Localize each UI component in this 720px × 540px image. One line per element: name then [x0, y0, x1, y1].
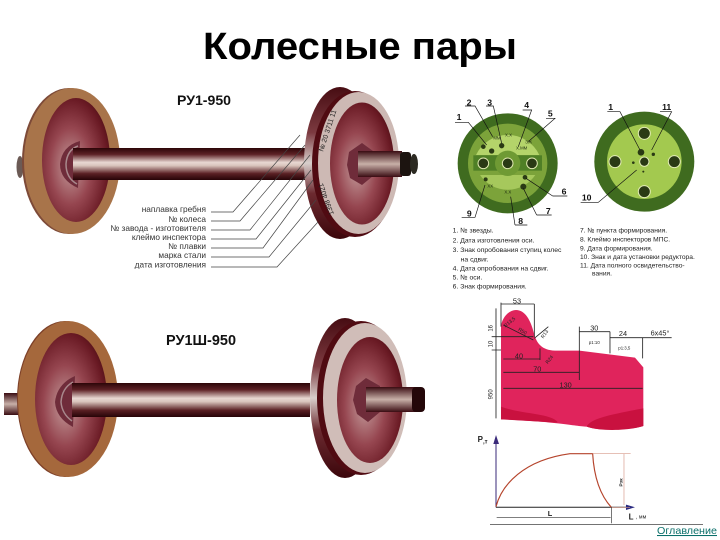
- dimension values: 130: [560, 380, 572, 389]
- curve: [496, 454, 611, 507]
- callout labels: № плавки: [168, 241, 206, 251]
- stamps on the end face: Х.Х: [505, 133, 512, 138]
- diagram numbers: 9: [467, 209, 472, 219]
- Рж dimension: [593, 454, 631, 507]
- callout labels: дата изготовления: [135, 260, 206, 270]
- diagram numbers: 1: [457, 112, 462, 122]
- dimension values: R50: [517, 327, 528, 337]
- load graph: L: [629, 512, 634, 521]
- footer rule: [490, 524, 703, 526]
- L dimension: [497, 507, 612, 523]
- stamps on the end face: ММ: [493, 135, 501, 140]
- callout labels: наплавка гребня: [142, 204, 206, 214]
- callout labels: [110, 204, 206, 270]
- legend: left column: 4. Дата опробования на сдвиг.: [453, 264, 549, 272]
- diagram numbers: 5: [548, 109, 553, 119]
- dimension values: 30: [590, 324, 598, 333]
- stamps on the end face: Х.Х: [504, 189, 511, 194]
- callout labels: марка стали: [158, 250, 206, 260]
- dimension lines: [492, 303, 672, 418]
- dimension values: 10: [489, 340, 495, 347]
- model label: РУ1Ш-950: РУ1Ш-950: [166, 333, 236, 349]
- legend: right column: 7. № пункта формирования.: [580, 228, 667, 235]
- callout labels: клеймо инспектора: [132, 232, 206, 242]
- diagram numbers: 3: [487, 97, 492, 107]
- axle: [72, 383, 310, 417]
- stamps on the end face: [487, 133, 532, 194]
- stamps on the end face: ХХ: [487, 183, 493, 188]
- dimension values: 16: [489, 324, 495, 332]
- dimension values: p1:3,5: [618, 345, 631, 350]
- wheelset: РУ1Ш-950: [4, 318, 425, 478]
- load graph: , мм: [636, 515, 647, 521]
- left wheel: [16, 88, 120, 234]
- load graph: Рзк: [618, 478, 624, 487]
- diagram numbers: 2: [467, 97, 472, 107]
- stamps on the end face: ЭЖ: [525, 139, 532, 144]
- wheel profile: [489, 297, 672, 430]
- dimension values: [489, 297, 669, 399]
- legend: right column: вания.: [592, 271, 612, 278]
- dimension values: 6x45°: [651, 328, 669, 337]
- dimension values: 24: [619, 329, 627, 338]
- dimension values: 950: [489, 389, 495, 399]
- diagram numbers: 11: [662, 102, 671, 112]
- right wheel: [304, 87, 418, 239]
- diagram: left axle end: [458, 113, 558, 213]
- diagram numbers: 8: [518, 216, 523, 226]
- dimension values: 40: [515, 352, 523, 361]
- load graph: ,т: [483, 439, 488, 445]
- diagram numbers: 6: [562, 187, 567, 197]
- callout leader lines: [211, 135, 318, 267]
- model label: РУ1-950: РУ1-950: [177, 92, 231, 108]
- legend: right column: 9. Дата формирования.: [580, 245, 653, 252]
- load graph: P: [478, 435, 484, 444]
- dimension values: 70: [533, 365, 541, 374]
- stamps on the end face: Х.ММ: [516, 145, 528, 150]
- diagram numbers: 7: [546, 206, 551, 216]
- wheelset: РУ1-950: 1398 4021: [318, 182, 336, 216]
- diagram numbers: 4: [524, 100, 529, 110]
- diagram leader lines: [455, 106, 672, 225]
- load graph: L: [548, 509, 553, 518]
- callout labels: № колеса: [168, 214, 206, 224]
- legend: left column: 3. Знак опробования ступиц колес: [453, 246, 562, 254]
- legend: right column: [580, 228, 695, 278]
- legend: right column: 10. Знак и дата установки редуктора.: [580, 254, 695, 261]
- dimension values: p1:10: [589, 340, 600, 345]
- diagram numbers: [457, 97, 671, 226]
- legend: left column: [453, 228, 562, 291]
- legend: left column: 1. № звезды.: [453, 228, 494, 235]
- bolt holes: [478, 158, 537, 169]
- legend: left column: 5. № оси.: [453, 274, 483, 281]
- axle: [73, 148, 310, 180]
- legend: right column: 8. Клеймо инспекторов МПС.: [580, 236, 670, 244]
- dimension values: 53: [513, 297, 521, 306]
- callout labels: № завода - изготовителя: [110, 223, 206, 233]
- legend: right column: 11. Дата полного освидетельство-: [580, 262, 685, 269]
- right wheel: [310, 318, 425, 478]
- dimension values: R13: [540, 329, 550, 340]
- left wheel: [4, 321, 118, 477]
- diagram numbers: 10: [582, 193, 592, 203]
- legend: left column: 6. Знак формирования.: [453, 284, 527, 291]
- wheel end diagrams: [453, 97, 695, 291]
- link: contents: Оглавление: [657, 525, 717, 537]
- dimension values: R24: [545, 354, 555, 365]
- diagram: right axle end: [594, 112, 694, 212]
- stamped numbers on the tread: № 20 3711 11: [318, 109, 338, 153]
- legend: left column: на сдвиг.: [461, 256, 489, 263]
- diagram numbers: 1: [608, 102, 613, 112]
- load graph: [478, 435, 647, 523]
- legend: left column: 2. Дата изготовления оси.: [453, 238, 535, 245]
- wheelset: РУ1-950: [16, 87, 418, 239]
- title: Колесные пары: [203, 26, 517, 68]
- dimension values: R13,5: [503, 316, 517, 329]
